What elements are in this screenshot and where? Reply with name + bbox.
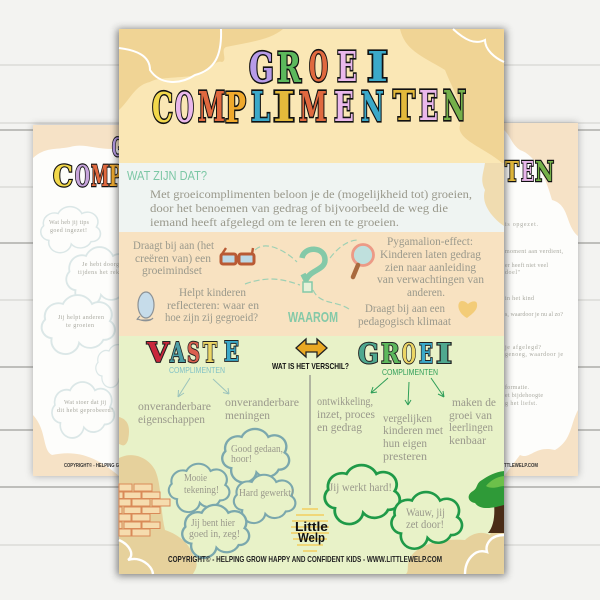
blue clouds xyxy=(169,429,295,558)
heading: vaste: V xyxy=(146,338,170,369)
blue cloud texts: Mooie xyxy=(184,473,207,484)
arrows: vaste xyxy=(178,378,229,397)
icon: heart xyxy=(458,301,477,318)
right page text lines: moment aan verdient, xyxy=(505,249,564,255)
icon: mirror xyxy=(137,292,154,321)
green cloud texts: zet door! xyxy=(406,519,444,531)
logo: little welp: Welp xyxy=(298,530,325,545)
header right cloud xyxy=(400,29,504,165)
definition text: iemand heeft afgelegd om te leren en te groeien. xyxy=(150,217,399,229)
left page cloud text: tijdens het rek xyxy=(78,270,119,276)
groei descriptions: vergelijken xyxy=(383,413,432,425)
heading: groei xyxy=(358,339,452,370)
why panel xyxy=(119,232,504,336)
heading: vaste: S xyxy=(187,338,200,369)
left page copyright: COPYRIGHT© - HELPING G xyxy=(64,462,119,469)
heading: vaste: T xyxy=(203,338,217,369)
title: complimenten: E xyxy=(334,83,354,131)
title: groei: R xyxy=(277,44,302,92)
green clouds xyxy=(325,465,462,549)
green cloud texts xyxy=(329,482,445,531)
left page partial title: M xyxy=(91,159,109,193)
left background page xyxy=(33,125,141,476)
blue cloud texts: Good gedaan, xyxy=(231,444,283,455)
blue cloud texts xyxy=(184,444,294,540)
title: complimenten: O xyxy=(175,84,194,132)
left page question clouds xyxy=(41,207,141,438)
heading: groei: R xyxy=(381,339,400,370)
why texts: Draagt bij aan een xyxy=(365,303,445,315)
header panel xyxy=(119,29,504,165)
left page cloud text: Wat heb jij tips xyxy=(49,220,90,226)
definition panel xyxy=(119,163,504,232)
heading: wat zijn dat: WAT ZIJN DAT? xyxy=(127,168,207,183)
right page copyright: TTLEWELP.COM xyxy=(504,463,538,469)
title: complimenten xyxy=(152,82,466,132)
vaste descriptions: onveranderbare xyxy=(225,397,299,409)
right page partial title: T xyxy=(505,157,519,188)
arrows: groei xyxy=(371,378,444,405)
left page partial title xyxy=(53,133,123,193)
subheading: groei complimenten: COMPLIMENTEN xyxy=(382,367,438,377)
blue cloud texts: tekening! xyxy=(184,485,219,496)
title: groei xyxy=(249,43,388,92)
main page xyxy=(119,29,504,574)
right background page xyxy=(490,123,578,476)
icon: double arrow xyxy=(296,339,327,357)
heading: groei: O xyxy=(402,339,416,370)
dashed connector lines xyxy=(245,240,358,309)
left page cloud text: dit hebt geprobeerd! xyxy=(57,408,113,414)
left page cloud text: Jij helpt anderen xyxy=(58,315,104,321)
subheading: vaste complimenten: COMPLIMENTEN xyxy=(169,365,225,375)
blue cloud texts: Hard gewerkt! xyxy=(239,488,294,499)
title: complimenten: T xyxy=(393,82,415,130)
icon: tree xyxy=(469,471,504,533)
right page text lines: s, waardoor je nu al zo? xyxy=(505,312,563,318)
heading: groei: E xyxy=(419,339,433,370)
groei descriptions: ontwikkeling, xyxy=(317,396,373,408)
right page corner blobs xyxy=(504,123,578,476)
why texts: reflecteren: waar en xyxy=(167,300,259,312)
right page text lines: formatie. xyxy=(505,384,530,391)
white corner outlines xyxy=(119,535,504,574)
title: groei: E xyxy=(337,43,357,91)
right page text lines: je afgelegd? xyxy=(504,344,541,351)
title: complimenten: M xyxy=(198,83,225,131)
why texts: Pygamalion-effect: xyxy=(387,236,473,248)
right page text lines: doel" xyxy=(505,270,521,276)
definition text: Met groeicomplimenten beloon je de (mogelijkheid tot) groeien, xyxy=(150,189,472,201)
left page cloud text: te groeien xyxy=(66,323,94,329)
why texts: van verwachtingen van xyxy=(377,274,484,286)
why texts xyxy=(133,236,484,328)
title: groei: G xyxy=(249,44,274,92)
right page partial title xyxy=(505,157,554,188)
title: complimenten: I xyxy=(273,83,295,131)
title: complimenten: P xyxy=(225,84,246,132)
left page partial title: P xyxy=(109,159,122,193)
title: complimenten: E xyxy=(419,82,438,130)
blue cloud texts: goed in, zeg! xyxy=(189,529,240,540)
why texts: pedagogisch klimaat xyxy=(358,316,452,328)
groei descriptions: kinderen met xyxy=(383,425,444,437)
right page text lines: is opgezet. xyxy=(505,222,538,228)
heading: vaste: A xyxy=(169,338,186,369)
title: complimenten: M xyxy=(299,83,327,131)
copyright: COPYRIGHT© - HELPING GROW HAPPY AND CONFIDENT KIDS - WWW.LITTLEWELP.COM xyxy=(168,554,442,564)
groei descriptions: presteren xyxy=(383,451,427,463)
heading: wat is het verschil: WAT IS HET VERSCHIL? xyxy=(272,361,349,371)
left page cloud text: goed ingezet! xyxy=(50,228,87,234)
title: groei: I xyxy=(367,43,388,91)
why texts: Draagt bij aan (het xyxy=(133,240,215,252)
why texts: creëren van) een xyxy=(135,253,211,265)
logo: little welp: Little xyxy=(295,519,328,534)
groei descriptions: inzet, proces xyxy=(317,409,376,421)
vaste descriptions xyxy=(138,397,299,426)
tan corner blobs xyxy=(119,417,504,574)
definition text: door het benoemen van gedrag of bijvoorbeeld de weg die xyxy=(150,203,448,215)
why texts: Kinderen laten gedrag xyxy=(380,249,481,261)
icon: question mark xyxy=(302,249,325,292)
green cloud texts: Wauw, jij xyxy=(406,507,445,519)
heading: waarom: WAAROM xyxy=(288,309,338,326)
right page text lines: er heeft niet veel xyxy=(505,262,548,269)
left page cloud text: Wat stoer dat jij xyxy=(64,400,106,406)
blue cloud texts: Jij bent hier xyxy=(191,518,236,529)
center divider xyxy=(309,375,311,505)
vaste descriptions: meningen xyxy=(225,410,270,422)
right page text lines: genoeg, waardoor je xyxy=(505,352,563,358)
why texts: anderen. xyxy=(407,287,445,299)
vaste descriptions: onveranderbare xyxy=(138,401,211,413)
groei descriptions: maken de xyxy=(452,397,496,409)
groei descriptions xyxy=(317,396,496,463)
title: complimenten: C xyxy=(152,84,173,132)
right page text lines: in het kind xyxy=(505,296,534,302)
why texts: zien naar aanleiding xyxy=(385,262,476,274)
right page text lines xyxy=(504,222,564,407)
header white outlines xyxy=(119,29,504,82)
heading: vaste xyxy=(146,337,239,369)
title: complimenten: N xyxy=(443,82,466,130)
green cloud texts: Jij werkt hard! xyxy=(329,482,392,494)
definition text xyxy=(150,189,472,229)
main page shadow xyxy=(117,29,506,576)
groei descriptions: hun eigen xyxy=(383,438,427,450)
icon: magnifying glass xyxy=(352,244,374,277)
heading: groei: G xyxy=(358,339,379,370)
title: complimenten: L xyxy=(251,83,270,131)
groei descriptions: en gedrag xyxy=(317,422,362,434)
why texts: hoe zijn zij gegroeid? xyxy=(165,312,258,324)
right page partial title: E xyxy=(521,157,534,188)
left page cloud text: Je hebt doorg xyxy=(82,262,119,268)
left page corner blobs xyxy=(33,125,125,476)
heading: groei: I xyxy=(436,339,452,370)
icon: brick wall xyxy=(119,484,170,536)
right page partial title: N xyxy=(535,157,554,188)
icon: glasses xyxy=(221,248,254,264)
left page cloud text xyxy=(49,220,119,414)
groei descriptions: leerlingen xyxy=(449,422,493,434)
logo: little welp xyxy=(291,509,329,551)
title: complimenten: N xyxy=(361,83,384,131)
title: groei: O xyxy=(309,43,328,91)
right page text lines: g het liefst. xyxy=(505,400,538,407)
why texts: groeimindset xyxy=(142,265,203,277)
right page text lines: et bijdehoogte xyxy=(505,393,543,399)
blue cloud texts: hoor! xyxy=(231,454,252,465)
heading: vaste: E xyxy=(224,337,239,368)
why texts: Helpt kinderen xyxy=(179,287,246,299)
groei descriptions: kenbaar xyxy=(449,435,486,447)
left page partial title: C xyxy=(53,159,73,193)
header left cloud xyxy=(119,29,283,110)
vaste descriptions: eigenschappen xyxy=(138,414,205,426)
left page partial title: O xyxy=(75,159,90,193)
left page partial title: G xyxy=(112,133,123,162)
groei descriptions: groei van xyxy=(449,410,492,422)
difference panel xyxy=(119,336,504,574)
